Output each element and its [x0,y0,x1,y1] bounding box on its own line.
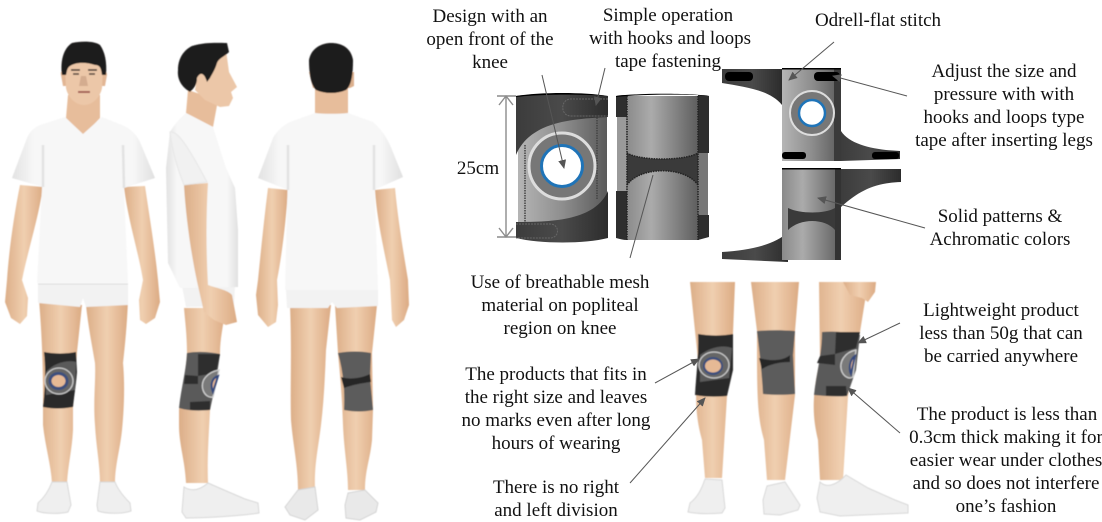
panel: flat back pattern [722,168,901,262]
text: lightweight: Lightweight product [923,300,1080,321]
panel: three-view mannequin wearing knee brace [5,42,409,520]
panel: leg close-up back [751,282,800,515]
arrow: solid patterns [818,198,925,228]
arrow: lightweight [858,323,900,343]
icon: close-up side shoe [817,475,908,516]
icon: open knee ring [529,133,595,199]
text: right size: The products that fits in [465,364,647,385]
panel: brace interior view [616,94,709,240]
text: stitch: Odrell-flat stitch [815,10,942,31]
text: open front design: knee [472,52,508,73]
panel: brace exterior view [516,93,608,242]
arrow: no right-left division [630,398,705,483]
icon: close-up front shoe [688,479,725,514]
icon: knee brace back close-up [757,330,795,395]
figure: side view [166,43,259,518]
icon: front knee brace [43,352,77,408]
text: no left or right: There is no right [493,477,620,498]
icon: back knee brace [338,352,373,412]
text: simple operation: with hooks and loops [589,28,751,49]
text: adjust size: tape after inserting legs [915,130,1093,151]
text: lightweight: be carried anywhere [924,346,1078,367]
text: lightweight: less than 50g that can [919,323,1083,344]
text: breathable mesh: material on popliteal [481,295,639,316]
icon: knee brace side close-up [814,332,860,396]
icon: back right shoe [345,490,378,520]
icon: side shoe [182,483,259,518]
arrow: adjust size [833,76,907,96]
text: adjust size: hooks and loops type [924,107,1084,128]
dimension: 25cm height: 25cm [457,158,499,179]
figure: front view [5,42,160,513]
arrow: mesh material [630,175,653,258]
text: thin product: easier wear under clothes [910,450,1102,471]
text: adjust size: pressure with with [934,84,1075,105]
text: open front design: open front of the [426,29,554,50]
panel: leg close-up side [814,282,908,516]
icon: knee brace front close-up [695,334,733,397]
text: right size: hours of wearing [492,433,621,454]
text: thin product: The product is less than [917,404,1098,425]
text: thin product: 0.3cm thick making it for [909,427,1102,448]
text: thin product: and so does not interfere [913,473,1099,494]
text: right size: no marks even after long [462,410,651,431]
text: adjust size: Adjust the size and [931,61,1077,82]
text: open front design: Design with an [432,6,548,27]
text: solid patterns: Solid patterns & [938,206,1062,227]
text: right size: the right size and leaves [465,387,647,408]
arrow: right size [655,359,699,383]
text: breathable mesh: region on knee [504,318,616,339]
icon: flat pattern ring [790,91,834,135]
text: breathable mesh: Use of breathable mesh [471,272,650,293]
arrow: thin product [848,388,900,433]
arrow: flat stitch [789,42,834,80]
text: thin product: one’s fashion [956,496,1057,517]
arrow: hook and loop [596,68,605,105]
arrow: open front [542,75,564,168]
text: simple operation: tape fastening [615,51,722,72]
panel: flat front pattern [722,68,900,161]
text: no left or right: and left division [494,500,618,521]
panel: leg close-up front [688,282,735,514]
text: simple operation: Simple operation [603,5,734,26]
figure: back view [256,43,409,520]
dimension: 25cm height [457,96,516,237]
text: solid patterns: Achromatic colors [930,229,1070,250]
icon: back left shoe [285,487,318,520]
icon: close-up back shoe [763,482,800,515]
icon: side knee brace [179,352,220,411]
icon: front right shoe [97,482,131,513]
icon: front left shoe [37,482,71,513]
